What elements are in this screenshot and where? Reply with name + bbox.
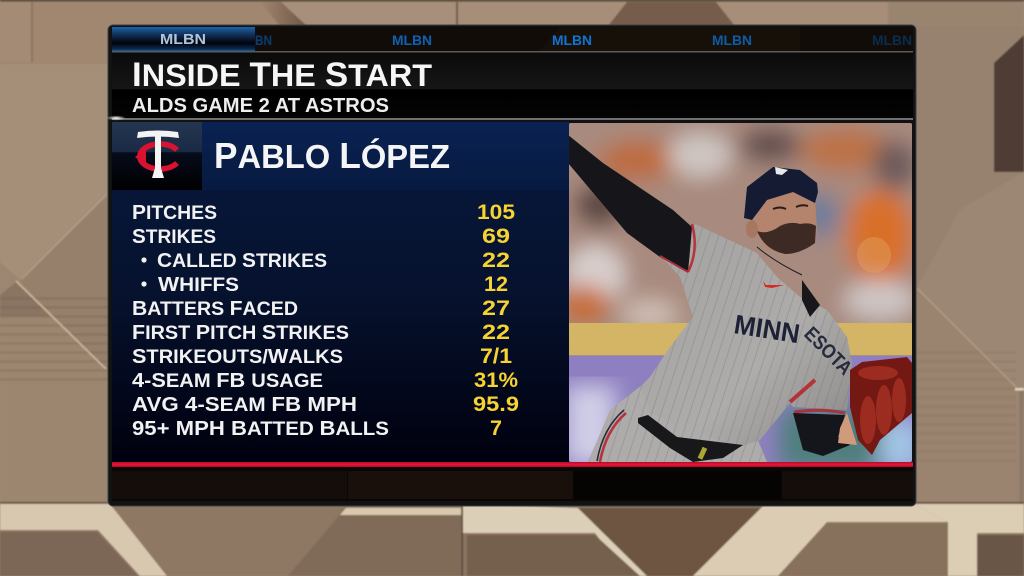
title band bbox=[106, 51, 913, 120]
row: strikeouts walks: STRIKEOUTS/ WALKS bbox=[132, 345, 343, 368]
throwing arm sleeve bbox=[568, 135, 692, 273]
jersey: ESOTA bbox=[799, 323, 856, 380]
ticker label: active MLBN: MLBN bbox=[160, 32, 206, 48]
title: INSIDE THE START bbox=[132, 56, 432, 94]
blurred stadium crowd bbox=[569, 123, 912, 462]
ticker label: clipped MLBN: BN bbox=[255, 33, 272, 48]
row: whiffs: 12 bbox=[484, 273, 508, 296]
red rule bbox=[112, 462, 913, 467]
stats panel bbox=[112, 122, 569, 462]
row: 4-seam usage: 31% bbox=[474, 369, 518, 392]
photo: Pablo López pitching bbox=[569, 123, 912, 462]
row: strikes bbox=[132, 225, 510, 248]
row: batted balls bbox=[132, 417, 502, 440]
subtitle: ALDS GAME 2 AT ASTROS bbox=[132, 94, 389, 117]
row: batted balls: 95+ MPH B ATTED BALLS bbox=[132, 417, 389, 440]
row: whiffs bbox=[141, 273, 508, 296]
row: strikeouts walks bbox=[132, 345, 512, 368]
belt bbox=[638, 415, 743, 462]
row: first pitch strikes: FIRST PITCH STRIKES bbox=[132, 321, 349, 344]
jersey bbox=[640, 223, 856, 448]
player header band bbox=[112, 122, 569, 190]
ticker label: MLBN 3: MLBN bbox=[552, 33, 592, 48]
row: first pitch strikes: 22 bbox=[482, 321, 510, 344]
row: called strikes bbox=[141, 249, 510, 272]
row: batters faced bbox=[132, 297, 510, 320]
inner undershirt bbox=[802, 280, 820, 317]
ticker label: MLBN 5: MLBN bbox=[872, 33, 912, 48]
jersey lettering: MINN bbox=[732, 309, 802, 349]
player name: PABLO LÓPEZ bbox=[214, 135, 450, 176]
ticker label: MLBN 4: MLBN bbox=[712, 33, 752, 48]
row: called strikes: CALLED STRIKES bbox=[157, 249, 327, 272]
glove-side forearm bbox=[793, 413, 857, 456]
nike swoosh bbox=[763, 281, 784, 288]
ticker label: MLBN 2: MLBN bbox=[392, 33, 432, 48]
row: called strikes: 22 bbox=[482, 249, 510, 272]
row: avg velocity: AVG 4-S EAM FB MPH bbox=[132, 393, 357, 416]
row: avg velocity bbox=[132, 393, 519, 416]
row: 4-seam usage bbox=[132, 369, 518, 392]
row: first pitch strikes bbox=[132, 321, 510, 344]
row: strikes: STRIKES bbox=[132, 225, 216, 248]
head bbox=[744, 167, 818, 275]
graphic panel frame bbox=[106, 25, 920, 506]
stats table bbox=[132, 201, 519, 440]
icon: Twins TC logo bbox=[112, 122, 202, 190]
wood blocks along bottom bbox=[0, 504, 1024, 576]
glove bbox=[850, 357, 912, 455]
row: pitches bbox=[132, 201, 515, 224]
bottom strip bbox=[112, 467, 913, 501]
row: strikes: 69 bbox=[482, 225, 510, 248]
row: whiffs: WHIFFS bbox=[158, 273, 239, 296]
row: avg velocity: 95.9 bbox=[473, 393, 519, 416]
row: batters faced: BATTERS FACED bbox=[132, 297, 298, 320]
row: pitches: PITCHES bbox=[132, 201, 217, 224]
row: strikeouts walks: 7/1 bbox=[480, 345, 512, 368]
ticker strip bbox=[112, 27, 913, 52]
row: batters faced: 27 bbox=[482, 297, 510, 320]
row: pitches: 105 bbox=[477, 201, 515, 224]
row: 4-seam usage: 4-SEAM FB USAGE bbox=[132, 369, 323, 392]
row: batted balls: 7 bbox=[490, 417, 502, 440]
pants bbox=[588, 385, 767, 462]
